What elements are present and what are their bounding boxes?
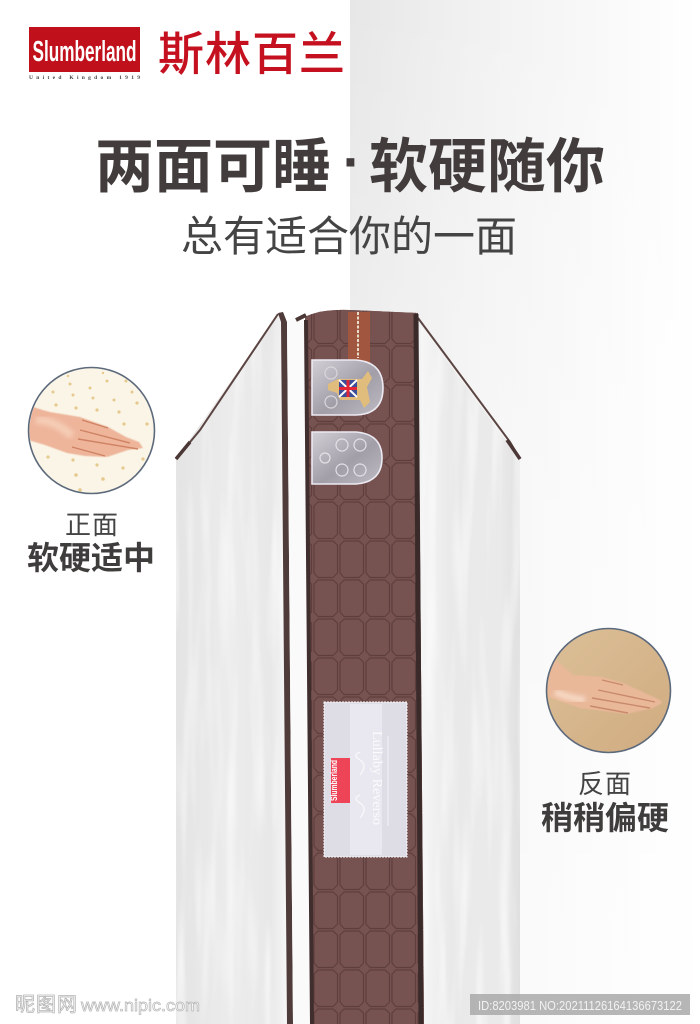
label: back side: 稍稍偏硬 bbox=[541, 800, 669, 836]
title: · bbox=[343, 130, 361, 193]
logo: Slumberland badge: United Kingdom 1919 bbox=[29, 75, 140, 81]
red mini logo tag: Slumberland bbox=[329, 760, 339, 801]
latex pinholes bbox=[46, 372, 149, 492]
label: front side: 正面 bbox=[65, 510, 119, 540]
logo: Slumberland badge bbox=[29, 27, 140, 81]
title: 软硬随你 bbox=[369, 134, 605, 200]
badge with union jack crest bbox=[312, 360, 383, 415]
hand pressing surface bbox=[28, 405, 143, 457]
label: back side bbox=[541, 769, 669, 836]
label: back side: 反面 bbox=[578, 769, 632, 799]
circle photo: front latex surface bbox=[28, 368, 154, 494]
white centre strip bbox=[287, 316, 312, 1024]
badge with ornament bbox=[312, 432, 382, 484]
sewn-on fabric label: Lullaby Reverso bbox=[369, 731, 384, 825]
label: front side: 软硬适中 bbox=[27, 540, 155, 576]
subtitle: 总有适合你的一面 bbox=[181, 213, 517, 260]
circle photo: back firm surface bbox=[540, 628, 670, 752]
title: 两面可睡 bbox=[95, 134, 331, 200]
background: right half gradient bbox=[350, 0, 700, 1024]
watermark: site name bbox=[15, 994, 200, 1016]
leather strap bbox=[348, 312, 370, 364]
sewn-on fabric label bbox=[324, 702, 407, 857]
watermark: site name: 昵图网 bbox=[15, 994, 77, 1016]
logo: Chinese brand name: 斯林百兰 bbox=[158, 28, 346, 80]
red mini logo tag bbox=[329, 758, 350, 803]
watermark: site name: www.nipic.com bbox=[80, 996, 200, 1015]
title bbox=[95, 130, 605, 200]
watermark: image ID bar bbox=[470, 994, 690, 1015]
left white quilted panel bbox=[176, 310, 291, 1024]
mattress: folded side view bbox=[176, 305, 521, 1024]
hand resting on surface bbox=[548, 660, 662, 714]
brown side border with quilting bbox=[296, 305, 430, 1024]
logo: Slumberland badge: Slumberland bbox=[32, 36, 136, 68]
left piping bbox=[278, 312, 293, 1024]
label: front side bbox=[27, 510, 155, 576]
right white quilted panel bbox=[418, 318, 521, 1024]
